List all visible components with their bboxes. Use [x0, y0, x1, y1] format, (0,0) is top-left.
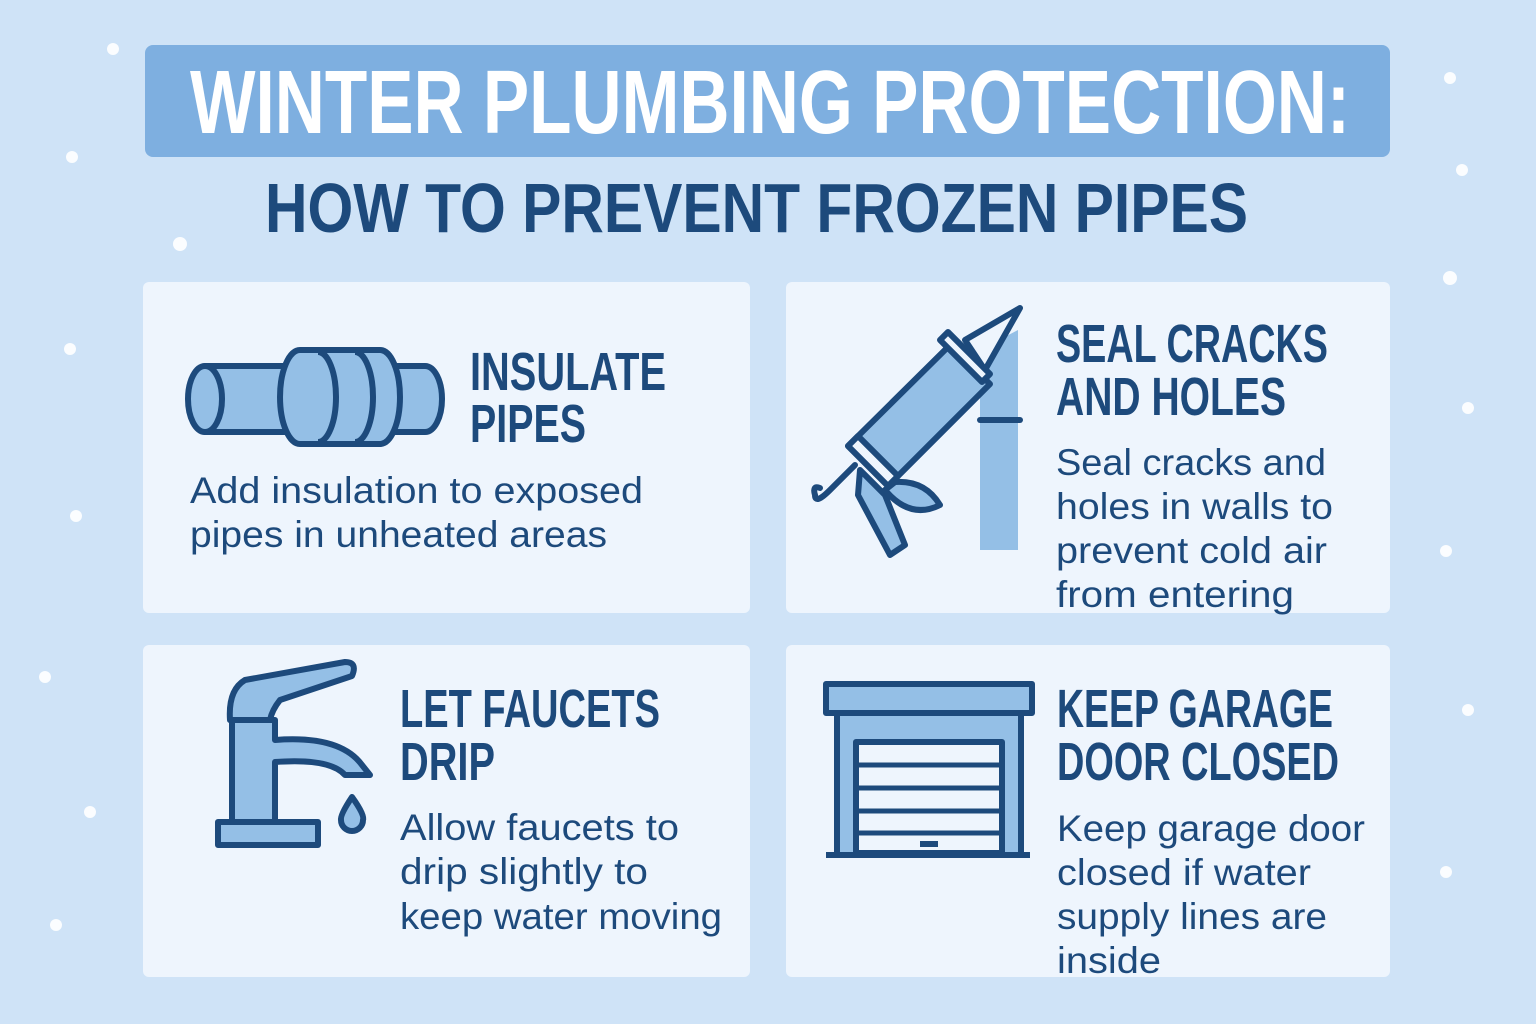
heading — [1056, 314, 1328, 427]
icon: faucet — [218, 662, 370, 845]
heading — [470, 342, 666, 454]
panel: garage door — [786, 645, 1390, 981]
panel: faucets drip — [143, 645, 750, 977]
body text — [190, 470, 643, 555]
body text: Add insulation to exposed — [190, 470, 643, 511]
icon: caulk gun — [814, 308, 1020, 555]
body text: inside — [1057, 940, 1161, 981]
heading: PIPES — [470, 394, 586, 454]
body text: Keep garage door — [1057, 808, 1365, 849]
body text: holes in walls to — [1056, 486, 1333, 527]
subtitle: HOW TO PREVENT FROZEN PIPES — [265, 169, 1248, 247]
body text: Allow faucets to — [400, 807, 679, 848]
body text: prevent cold air — [1056, 530, 1327, 571]
heading: SEAL CRACKS — [1056, 314, 1328, 374]
heading: LET FAUCETS — [400, 679, 660, 739]
icon: insulated pipe — [188, 350, 442, 444]
heading: INSULATE — [470, 342, 666, 402]
body text: Seal cracks and — [1056, 442, 1326, 483]
body text: closed if water — [1057, 852, 1311, 893]
body text: drip slightly to — [400, 851, 648, 892]
heading: DRIP — [400, 732, 495, 792]
panel: seal cracks — [786, 282, 1390, 615]
heading — [1057, 679, 1339, 792]
heading — [400, 679, 660, 792]
icon: garage door — [826, 684, 1032, 855]
body text: pipes in unheated areas — [190, 514, 607, 555]
body text: keep water moving — [400, 896, 722, 937]
panel: insulate pipes — [143, 282, 750, 613]
body text: from entering — [1056, 574, 1294, 615]
heading: AND HOLES — [1056, 367, 1286, 427]
body text: supply lines are — [1057, 896, 1327, 937]
heading: KEEP GARAGE — [1057, 679, 1333, 739]
body text — [1057, 808, 1365, 981]
body text — [400, 807, 722, 937]
heading: DOOR CLOSED — [1057, 732, 1339, 792]
body text — [1056, 442, 1333, 615]
